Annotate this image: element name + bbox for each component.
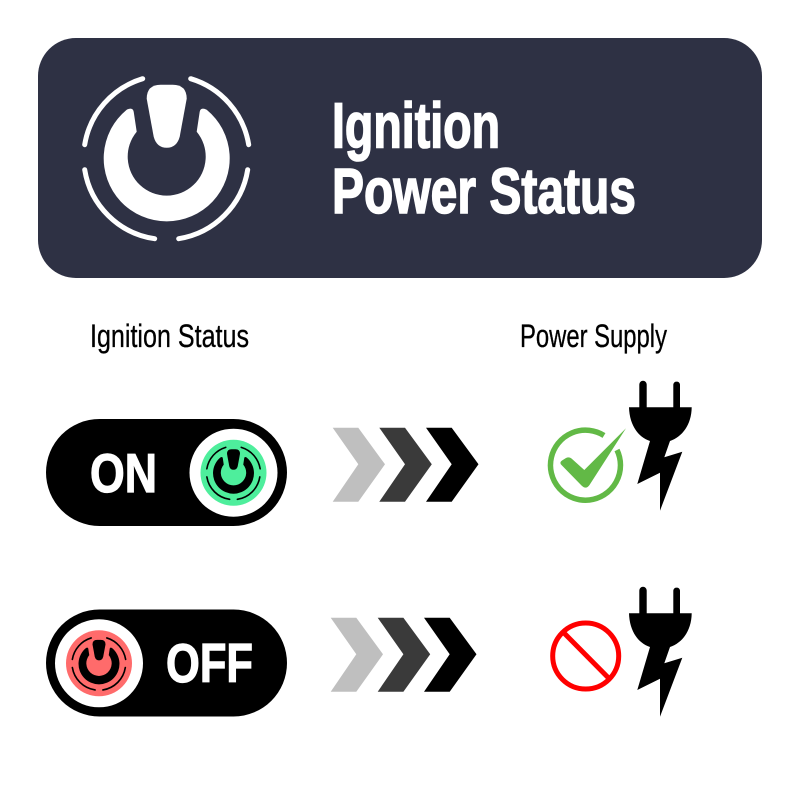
arrows: off row: [331, 618, 476, 692]
icon: ignition power symbol: [85, 79, 249, 239]
icon: plug on: [629, 381, 692, 511]
arrows: on row: [333, 428, 478, 502]
heading: power supply: Power Supply: [520, 318, 667, 354]
toggle: off: [46, 610, 287, 716]
title: Power Status: [332, 155, 636, 227]
toggle: on: [46, 419, 287, 526]
icon: power symbol red: [72, 638, 126, 690]
icon: power symbol green: [207, 447, 260, 499]
icon: plug off: [629, 587, 692, 717]
toggle: off: OFF: [166, 632, 253, 694]
toggle: on: ON: [90, 442, 157, 504]
heading: ignition status: Ignition Status: [90, 318, 249, 354]
icon: red prohibited sign: [553, 623, 619, 689]
icon: green check: [550, 428, 626, 500]
title: Ignition: [332, 90, 500, 162]
header banner: [38, 38, 762, 278]
